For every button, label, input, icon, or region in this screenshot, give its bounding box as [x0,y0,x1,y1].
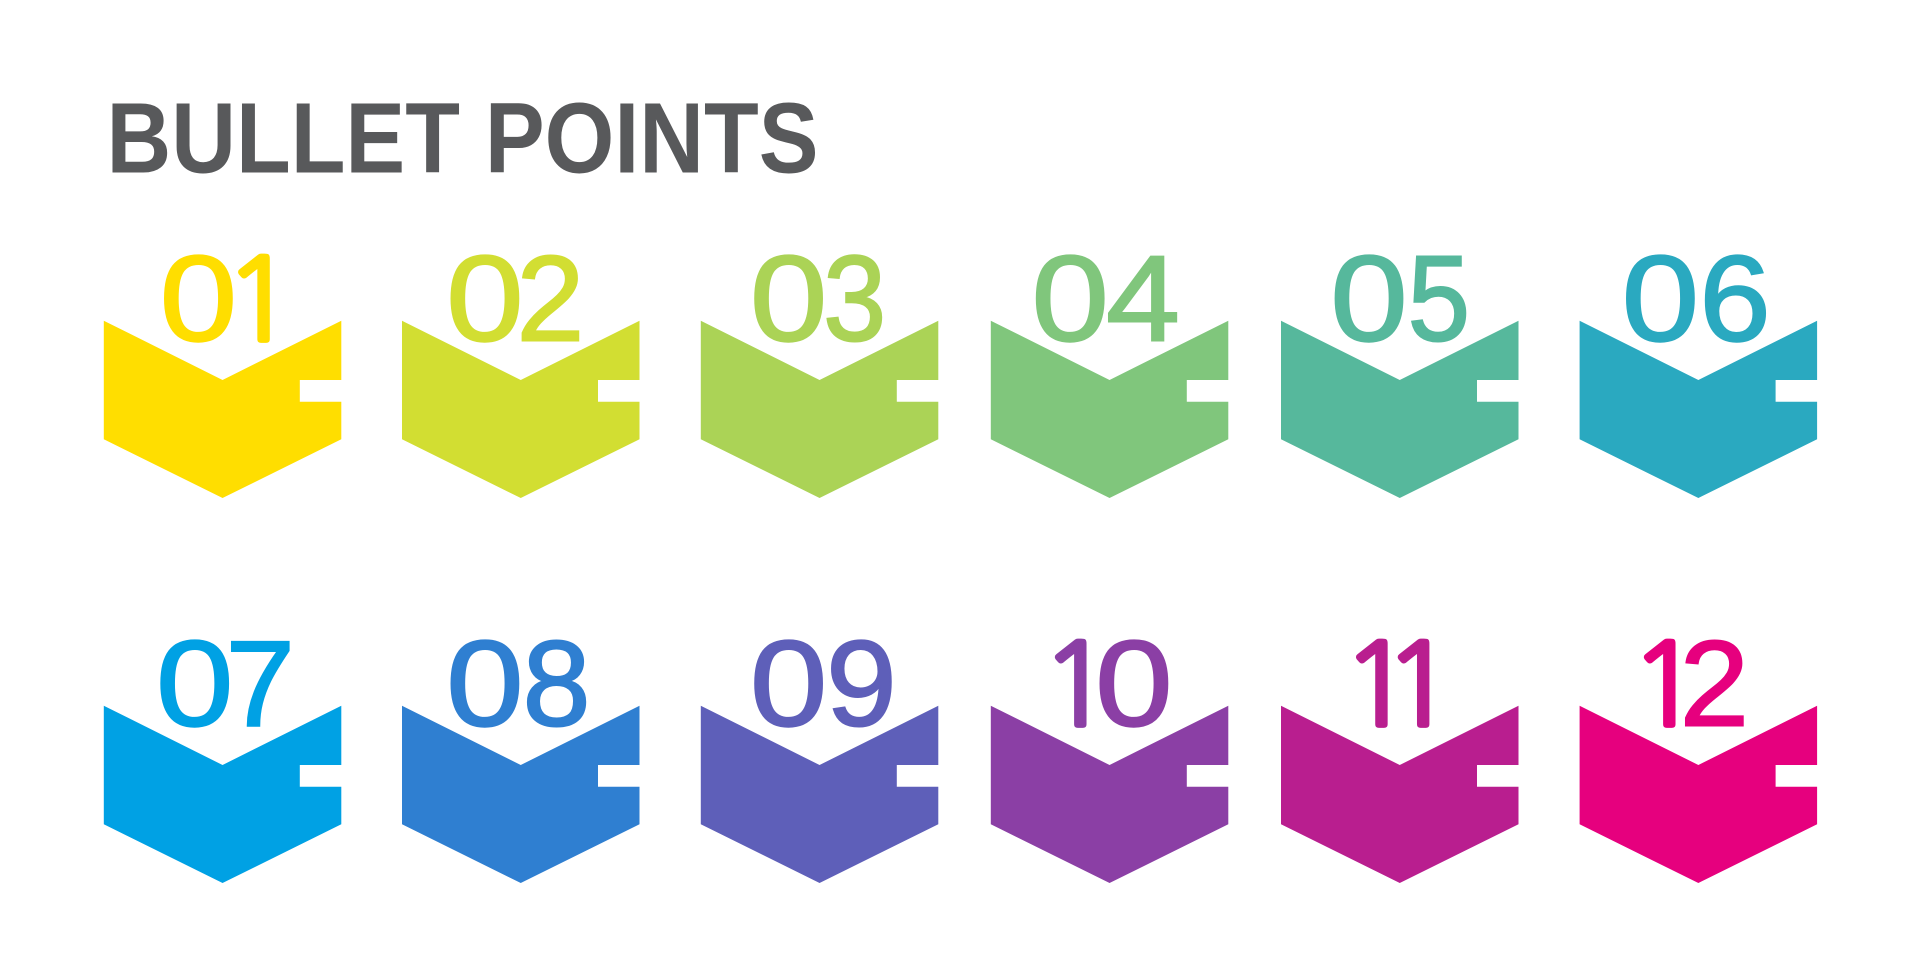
bullet 06: 0 [1622,230,1699,367]
bullet 10: 1 [1039,629,1113,743]
bullet 04: 4 [1106,231,1180,367]
bullet 10: 0 [1095,615,1173,752]
title: BULLET POINTS [106,83,818,195]
bullet 06 [1580,230,1817,498]
bullet 01: 0 [160,230,237,367]
bullet 08 [402,615,640,883]
bullet 10 [991,615,1228,883]
bullet 07 [104,615,341,883]
bullet 08: 8 [523,616,590,752]
bullet 02 [402,230,640,498]
bullet 02: 0 [446,230,524,367]
bullet 08: 0 [446,615,524,752]
bullet 02: 2 [516,230,584,366]
bullet 07: 7 [226,616,295,752]
bullet 05: 0 [1330,230,1408,367]
bullet 09: 0 [750,615,827,752]
bullet 03 [701,230,938,498]
bullet 12 [1580,616,1817,883]
bullet 05: 5 [1408,230,1470,367]
bullet 12: 2 [1680,616,1749,752]
bullet 04 [991,230,1228,498]
bullet 05 [1281,230,1518,498]
bullet 03: 0 [750,230,827,367]
bullet 11: 1 [1341,629,1415,743]
bullet 11 [1281,629,1518,883]
bullet 04: 0 [1032,230,1109,367]
bullet 07: 0 [156,615,233,752]
bullet 11: 1 [1382,629,1456,743]
bullet 01: 1 [223,244,297,358]
bullet 09: 9 [826,616,897,752]
bullet 12: 1 [1628,629,1702,743]
bullet 03: 3 [823,230,886,366]
bullet 09 [701,615,938,883]
bullet 06: 6 [1699,230,1771,367]
bullet 01 [104,230,341,498]
